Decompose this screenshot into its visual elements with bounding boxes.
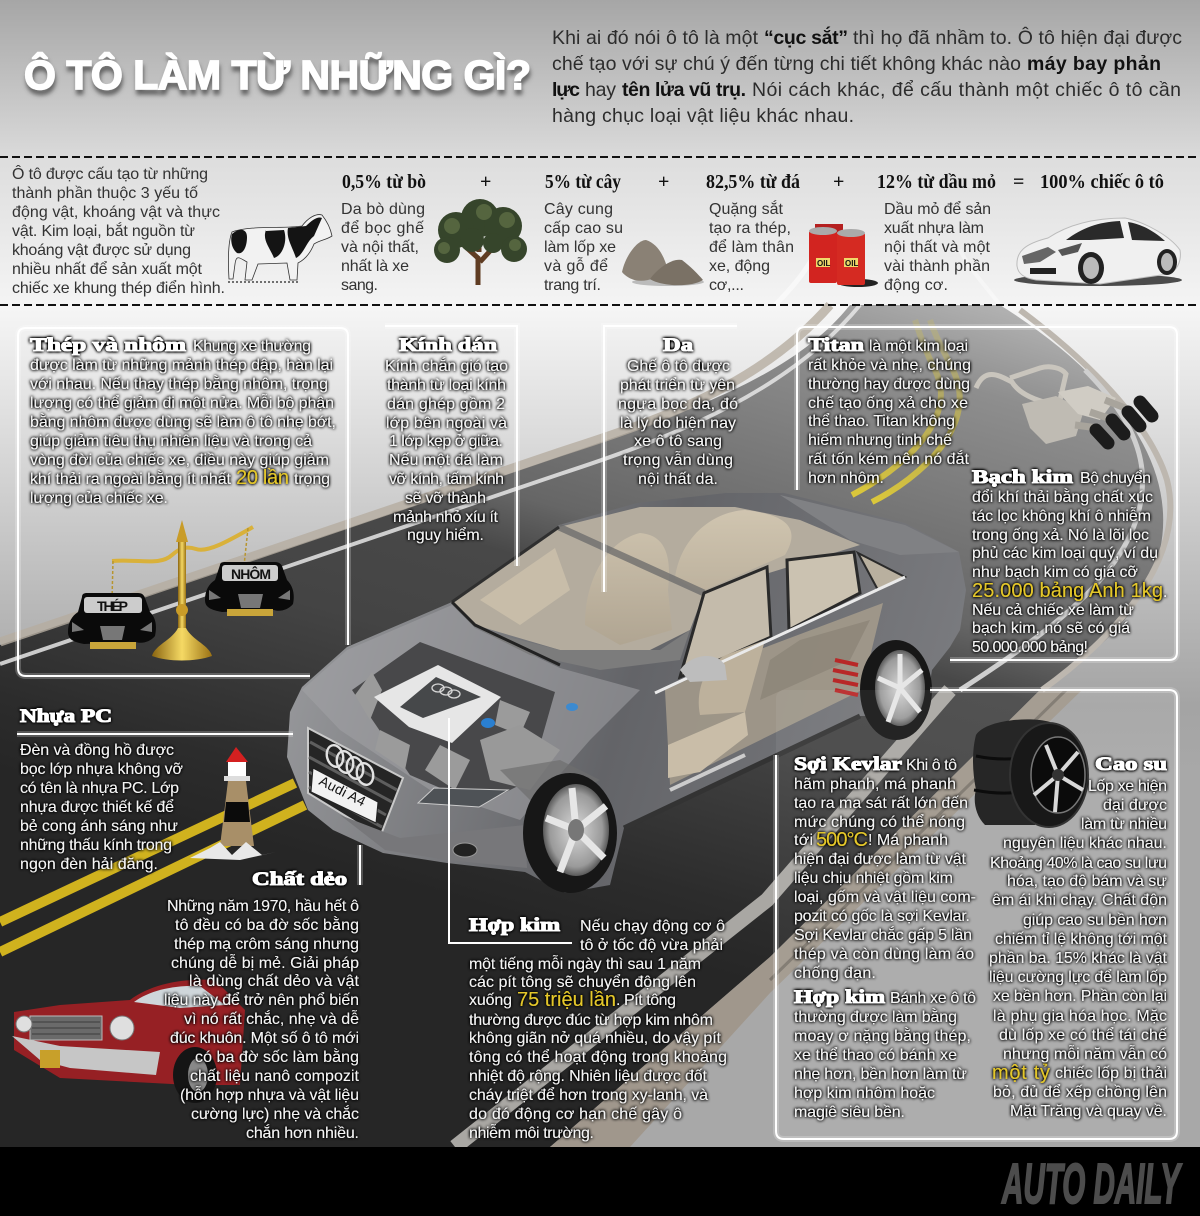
panel text: phát triển từ yên [620, 376, 735, 394]
lower bumper and fog lamp [340, 815, 527, 868]
panel text: bằng nhôm được dùng sẽ làm ô tô nhẹ bớt, [30, 412, 336, 431]
column: cow leather [341, 171, 426, 294]
panel text [385, 335, 508, 544]
panel: piston alloy text [469, 915, 727, 1142]
panel text [164, 869, 360, 1142]
total heading: 100% chiếc ô tô [1040, 171, 1164, 193]
icon: black car NHÔM [205, 562, 294, 616]
icon: white car [1014, 218, 1182, 286]
rubber text: êm ái khi chạy. Chất độn [992, 892, 1167, 909]
panel text: Nếu một đá làm [389, 452, 503, 469]
headlight [418, 788, 508, 807]
intro text block: hay [585, 79, 616, 101]
rubber text: là phụ gia hóa học. Mặc [993, 1008, 1167, 1025]
panel text: lớp bên ngoài và [386, 415, 507, 432]
column: tree rubber: cấp cao su [544, 220, 623, 237]
panel text: thành từ loại kính [387, 377, 506, 394]
number plate [311, 768, 378, 823]
car body [287, 493, 966, 893]
platinum text: 25.000 bảng Anh 1kg [972, 580, 1163, 602]
rubber text: chiếc lốp bị thải [1055, 1065, 1167, 1082]
rubber text: liệu cường lực để làm lốp [989, 968, 1167, 986]
dashed divider bottom [0, 304, 1200, 306]
panel text: thép mạ crôm sáng nhưng [174, 936, 359, 953]
rubber text: hóa, tạo độ bám và sự [1007, 873, 1167, 890]
column: cow leather: sang. [341, 277, 378, 294]
panel text: đúc khuôn. Một số ô tô mới [170, 1030, 359, 1047]
platinum text: 50.000.000 bảng! [972, 639, 1088, 656]
panel: piston alloy text: không giãn nở quá nhiều, do vậy pít [469, 1030, 722, 1047]
panel text [30, 335, 336, 507]
panel: piston alloy text: Hợp kim [469, 915, 560, 936]
title: Ô TÔ LÀM TỪ NHỮNG GÌ? [24, 52, 531, 98]
equals sign: = [1013, 171, 1024, 193]
titanium text: thường hay được dùng [808, 376, 970, 393]
wheel alloy text: Bánh xe ô tô [890, 990, 976, 1007]
panel text: khí thải ra ngoài bằng ít nhất [30, 469, 232, 488]
wheel alloy text: hợp kim nhôm hoặc [794, 1085, 935, 1102]
panel: laminated glass [385, 326, 517, 566]
composition intro text: khoáng vật được sử dụng [12, 242, 191, 259]
panel text: vì nó rất chắc, nhẹ và dễ [184, 1009, 359, 1028]
intro text block: lực [552, 79, 580, 101]
composition intro text: nhiều nhất để sản xuất một [12, 260, 203, 278]
platinum text [972, 467, 1167, 656]
panel: piston alloy text: thường được đúc từ hợp kim nhôm [469, 1012, 713, 1029]
platinum text: . [1163, 584, 1167, 601]
rubber text [989, 754, 1168, 1120]
intro text block: thì họ đã nhầm to. Ô tô hiện đại được [853, 26, 1182, 49]
panel text: những thấu kính trong [20, 837, 172, 854]
icon: lighthouse [190, 747, 276, 860]
intro text block: hàng chục loại vật liệu khác nhau. [552, 105, 854, 127]
platinum text: tác lọc không khí ô nhiễm [972, 506, 1151, 525]
column: oil plastics: động cơ. [884, 277, 948, 294]
rubber text: một tỷ [992, 1062, 1050, 1084]
column: oil plastics [877, 171, 996, 294]
panel: piston alloy text: xuống [469, 992, 512, 1009]
panel text: chắn hơn nhiều. [246, 1123, 359, 1142]
kevlar text: tạo ra ma sát rất lớn đến [794, 795, 968, 812]
platinum text: Nếu cả chiếc xe làm từ [972, 602, 1134, 619]
suspension spring [833, 660, 858, 695]
panel text: dán ghép gồm 2 [387, 396, 505, 413]
rubber text: làm từ nhiều [1081, 816, 1167, 833]
intro text block: máy bay phản [1027, 53, 1161, 75]
panel text: Những năm 1970, hầu hết ô [167, 898, 359, 915]
grille [308, 728, 403, 837]
platinum text: phủ các kim loại quý, ví dụ [972, 545, 1158, 562]
composition intro text: thành phần thuộc 3 yếu tố [12, 185, 198, 202]
icon: cow [228, 215, 332, 282]
intro text block: tên lửa vũ trụ. [622, 79, 746, 101]
rubber text: nguyên liệu khác nhau. [1003, 835, 1167, 852]
panel text: bẻ cong ánh sáng như [20, 818, 178, 835]
titanium text: rất khỏe và nhẹ, chúng [808, 357, 971, 374]
panel text: Nhựa PC [20, 706, 112, 727]
icon: tree [434, 199, 527, 285]
rear wheel [860, 640, 932, 740]
panel text: là dùng chất dẻo và vật [189, 973, 360, 990]
rubber text: Lốp xe hiện [1088, 778, 1167, 795]
panel text: lượng của chiếc xe. [30, 490, 168, 507]
panel text: cường lực) nhẹ và chắc [191, 1104, 359, 1123]
column: stone ore: để làm thân [709, 238, 794, 256]
panel text: Thép và nhôm [30, 335, 186, 356]
kevlar text: liệu chịu nhiệt gồm kim [794, 870, 953, 887]
column: stone ore: xe, động [709, 258, 770, 275]
column: stone ore: tạo ra thép, [709, 220, 791, 237]
panel text: Ghế ô tô được [627, 358, 730, 375]
kevlar text [794, 754, 976, 982]
panel: piston alloy text: cháy triệt để hơn trong xy-lanh, và [469, 1086, 708, 1104]
wheel alloy text: xe thể thao có bánh xe [794, 1046, 957, 1064]
rubber text: xe bền hơn. Phần còn lại [993, 988, 1167, 1005]
wheel alloy text: nhẹ hơn, bền hơn làm từ [794, 1066, 967, 1083]
intro text block: Nói cách khác, để cấu thành một chiếc ô tô cần [752, 79, 1181, 101]
composition intro text: Ô tô được cấu tạo từ những [12, 164, 208, 183]
icon: black car NHÔM: NHÔM [231, 565, 271, 582]
composition intro text: động vật, khoáng vật và thực [12, 204, 220, 221]
panel text: Khung xe thường [193, 338, 311, 355]
panel text: 20 lần [236, 467, 289, 489]
roof translucent [780, 495, 959, 555]
kevlar text: hiện đại được làm từ vật [794, 851, 967, 868]
platinum text: Bạch kim [972, 467, 1073, 488]
kevlar text: mức chúng có thể nóng [794, 813, 965, 831]
icon: oil barrels: OIL [817, 259, 830, 268]
sill shadow [624, 716, 860, 828]
plus sign: + [658, 171, 669, 193]
icon: tyres [973, 719, 1088, 827]
panel: titanium and platinum [797, 327, 1177, 660]
windshield and cabin [452, 507, 860, 650]
panel text: là lý do hiện nay [620, 415, 736, 432]
panel: piston alloy text: nhiễm môi trường. [469, 1123, 594, 1142]
panel: piston alloy text: nhiệt độ rộng. Nhiên liệu được đốt [469, 1068, 708, 1085]
side mirror [680, 656, 727, 682]
platinum text: Bộ chuyển [1080, 469, 1151, 487]
icon: black car THÉP [68, 593, 156, 649]
panel: piston alloy text: . Pít tông [616, 992, 676, 1009]
panel text: được làm từ những mảnh thép dập, hàn lại [30, 357, 333, 374]
panel text: xe ô tô sang [634, 433, 722, 450]
rubber text: nhưng mỗi năm vẫn có [1003, 1044, 1167, 1063]
kevlar text: Sợi Kevlar [794, 754, 903, 775]
plus sign: + [480, 171, 491, 193]
kevlar text: chống đạn. [794, 965, 876, 982]
hood sheen [302, 605, 640, 820]
panel text: giúp giảm tiêu thụ nhiên liệu và trong cả [30, 433, 312, 450]
panel text: tô đều có ba đờ sốc bằng [175, 915, 359, 934]
panel text: Đèn và đồng hồ được [20, 742, 174, 759]
titanium text: hiếm nhưng tinh chế [808, 432, 952, 449]
rubber text: bỏ, đủ để xếp chồng lên [993, 1083, 1167, 1101]
panel text: liệu này để trở nên phổ biến [164, 991, 359, 1009]
rubber text: giúp cao su bền hơn [1023, 912, 1167, 929]
column: oil plastics: Dầu mỏ để sản [884, 200, 991, 218]
platinum text: đổi khí thải bằng chất xúc [972, 487, 1153, 506]
panel: piston alloy text: do đó động cơ hạn chế gây ô [469, 1106, 682, 1123]
kevlar text: 500°C [816, 829, 868, 851]
icon: black car THÉP: THÉP [97, 598, 128, 614]
plus sign: + [833, 171, 844, 193]
engine bay [352, 642, 555, 805]
panel text [20, 706, 184, 873]
kevlar text: Khi ô tô [906, 757, 957, 774]
panel: piston alloy text: một tiếng mỗi ngày thì sau 1 năm [469, 954, 701, 973]
wheel alloy text: moay ơ nặng bằng thép, [794, 1026, 971, 1045]
titanium text: thể thao. Titan không [808, 412, 955, 430]
panel text: Kính chắn gió tạo [385, 356, 508, 375]
titanium text [808, 335, 971, 487]
platinum text: bạch kim, nó sẽ có giá [972, 620, 1130, 637]
intro text block [552, 25, 1182, 127]
titanium text: chế tạo ống xả cho xe [808, 395, 968, 412]
panel text: (hỗn hợp nhựa và vật liệu [180, 1085, 359, 1104]
connector line to piston alloy [449, 718, 572, 943]
wheel alloy text [794, 987, 976, 1121]
panel text: vòng đời của chiếc xe, điều này giúp giảm [30, 452, 329, 469]
panel: piston alloy text: tô ở tốc độ vừa phải [580, 937, 723, 954]
intro text block: “cục sắt” [764, 25, 848, 49]
panel text: chất liệu nanô compozit [190, 1068, 360, 1085]
kevlar text: loại, gốm và vật liệu com- [794, 889, 976, 906]
panel: piston alloy text: 75 triệu lần [517, 989, 616, 1011]
icon: oil barrels: OIL [845, 259, 858, 268]
column: oil plastics: 12% từ dầu mỏ [877, 171, 996, 193]
panel text: có tên là nhựa PC. Lớp [20, 780, 179, 797]
column: stone ore: Quặng sắt [709, 199, 784, 218]
panel text: trọng vẫn dùng [623, 450, 733, 469]
side windows [680, 567, 771, 677]
composition intro text: chiếc xe khung thép điển hình. [12, 279, 225, 297]
panel text: với nhau. Nếu thay thép bằng nhôm, trọng [30, 374, 328, 393]
column: oil plastics: nội thất và một [884, 239, 991, 256]
panel: leather [604, 326, 738, 592]
panel text: sẽ vỡ thành [405, 490, 486, 507]
wheel alloy text: Hợp kim [794, 987, 885, 1008]
titanium text: rất tốn kém nên nó đắt [808, 449, 970, 468]
column: stone ore: 82,5% từ đá [706, 171, 800, 193]
kevlar text: hãm phanh, má phanh [794, 776, 956, 793]
rubber text: đại được [1103, 797, 1167, 814]
panel text: lượng có thể giảm đi một nửa. Mỗi bộ phận [30, 393, 334, 412]
panel text: Chất dẻo [252, 869, 347, 890]
front wheel [523, 773, 617, 893]
composition intro text [12, 164, 225, 297]
kevlar text: pozit có gốc là sợi Kevlar. [794, 908, 970, 925]
panel: steel and aluminium [18, 328, 348, 676]
icon: oil barrels [809, 224, 878, 287]
column: tree rubber: 5% từ cây [545, 171, 621, 193]
rubber text: chiếm tỉ lệ không tới một [995, 931, 1168, 948]
rubber text: Cao su [1095, 754, 1168, 775]
panel text: ngọn đèn hải đăng. [20, 856, 158, 873]
kevlar text: thép và còn dùng làm áo [794, 946, 974, 963]
column: tree rubber: trang trí. [544, 277, 601, 294]
icon: gold scales [112, 520, 253, 660]
panel text: 1 lớp kẹp ở giữa. [389, 433, 503, 450]
rubber text: dù lốp xe có thể tái chế [999, 1026, 1167, 1044]
column: cow leather: nhất là xe [341, 258, 409, 275]
column: tree rubber [544, 171, 623, 294]
intro text block: Khi ai đó nói ô tô là một [552, 27, 759, 49]
column: cow leather: Da bò dùng [341, 201, 425, 218]
audi rings [324, 743, 376, 787]
panel: piston alloy text: Nếu chạy động cơ ô [580, 918, 725, 935]
column: cow leather: 0,5% từ bò [342, 171, 426, 193]
column: oil plastics: xuất nhựa làm [884, 220, 984, 237]
intro text block: chế tạo với sự chú ý đến từng chi tiết không khác nào [552, 53, 1021, 75]
panel text: có ba đờ sốc làm bằng [195, 1047, 359, 1066]
panel: piston alloy text: các pít tông sẽ chuyển động lên [469, 973, 696, 991]
wheel alloy text: thường được làm bằng [794, 1007, 957, 1026]
icon: red classic car [12, 980, 245, 1103]
panel text: Kính dán [399, 335, 498, 356]
panel: plastics [12, 845, 360, 1142]
platinum text: như bạch kim có giá cỡ [972, 564, 1138, 581]
panel text: nhựa được thiết kế để [20, 798, 174, 816]
panel text: nội thất da. [638, 471, 718, 488]
rubber text: Mặt Trăng và quay về. [1010, 1103, 1167, 1120]
kevlar text: tới [794, 832, 813, 849]
column: cow leather: và nội thất, [341, 239, 419, 256]
column: oil plastics: vài thành phần [884, 258, 990, 275]
panel text: vỡ kính, tấm kính [389, 471, 504, 488]
panel text: nguy hiểm. [407, 526, 484, 544]
column: stone ore: cơ,... [709, 277, 744, 294]
panel text [618, 335, 738, 488]
panel: piston alloy text: tông có thể hoạt động trong khoảng [469, 1048, 727, 1066]
column: tree rubber: làm lốp xe [544, 239, 616, 256]
platinum text: trong ống xả. Nó là lõi lọc [972, 527, 1149, 544]
icon: rocks [622, 240, 704, 286]
column: cow leather: để bọc ghế [341, 219, 424, 237]
composition intro text: vật. Kim loại, bắt nguồn từ [12, 221, 195, 240]
kevlar text: ! Má phanh [868, 832, 948, 849]
column: tree rubber: Cây cung [544, 201, 613, 218]
panel text: Da [663, 335, 694, 356]
panel text: mảnh nhỏ xíu ít [393, 509, 499, 526]
number plate: Audi A4 [317, 772, 369, 809]
rubber text: phần ba. 15% khác là vật [989, 950, 1168, 967]
panel: PC plastic [17, 706, 293, 873]
titanium text: là một kim loại [869, 338, 968, 355]
car: Audi A4 cutaway [287, 493, 966, 893]
titanium text: Titan [808, 335, 865, 356]
door cutaway seats [665, 603, 883, 785]
titanium text: hơn nhôm. [808, 470, 884, 487]
panel text: ngựa bọc da, đó [618, 396, 738, 413]
panel text: bọc lớp nhựa không vỡ [20, 761, 184, 778]
dashed divider top [0, 156, 1200, 158]
kevlar text: Sợi Kevlar chắc gấp 5 lần [794, 925, 972, 944]
rubber text: Khoảng 40% là cao su lưu [990, 855, 1167, 872]
column: stone ore [706, 171, 800, 294]
column: tree rubber: và gỗ để [544, 256, 608, 275]
panel text: trọng [294, 471, 330, 488]
icon: exhaust system [976, 367, 1152, 444]
panel: brake fibre, wheel alloy and rubber [776, 690, 1178, 1139]
wheel alloy text: magiê siêu bền. [794, 1104, 905, 1121]
panel text: chúng dễ bị mẻ. Giải pháp [171, 953, 359, 972]
